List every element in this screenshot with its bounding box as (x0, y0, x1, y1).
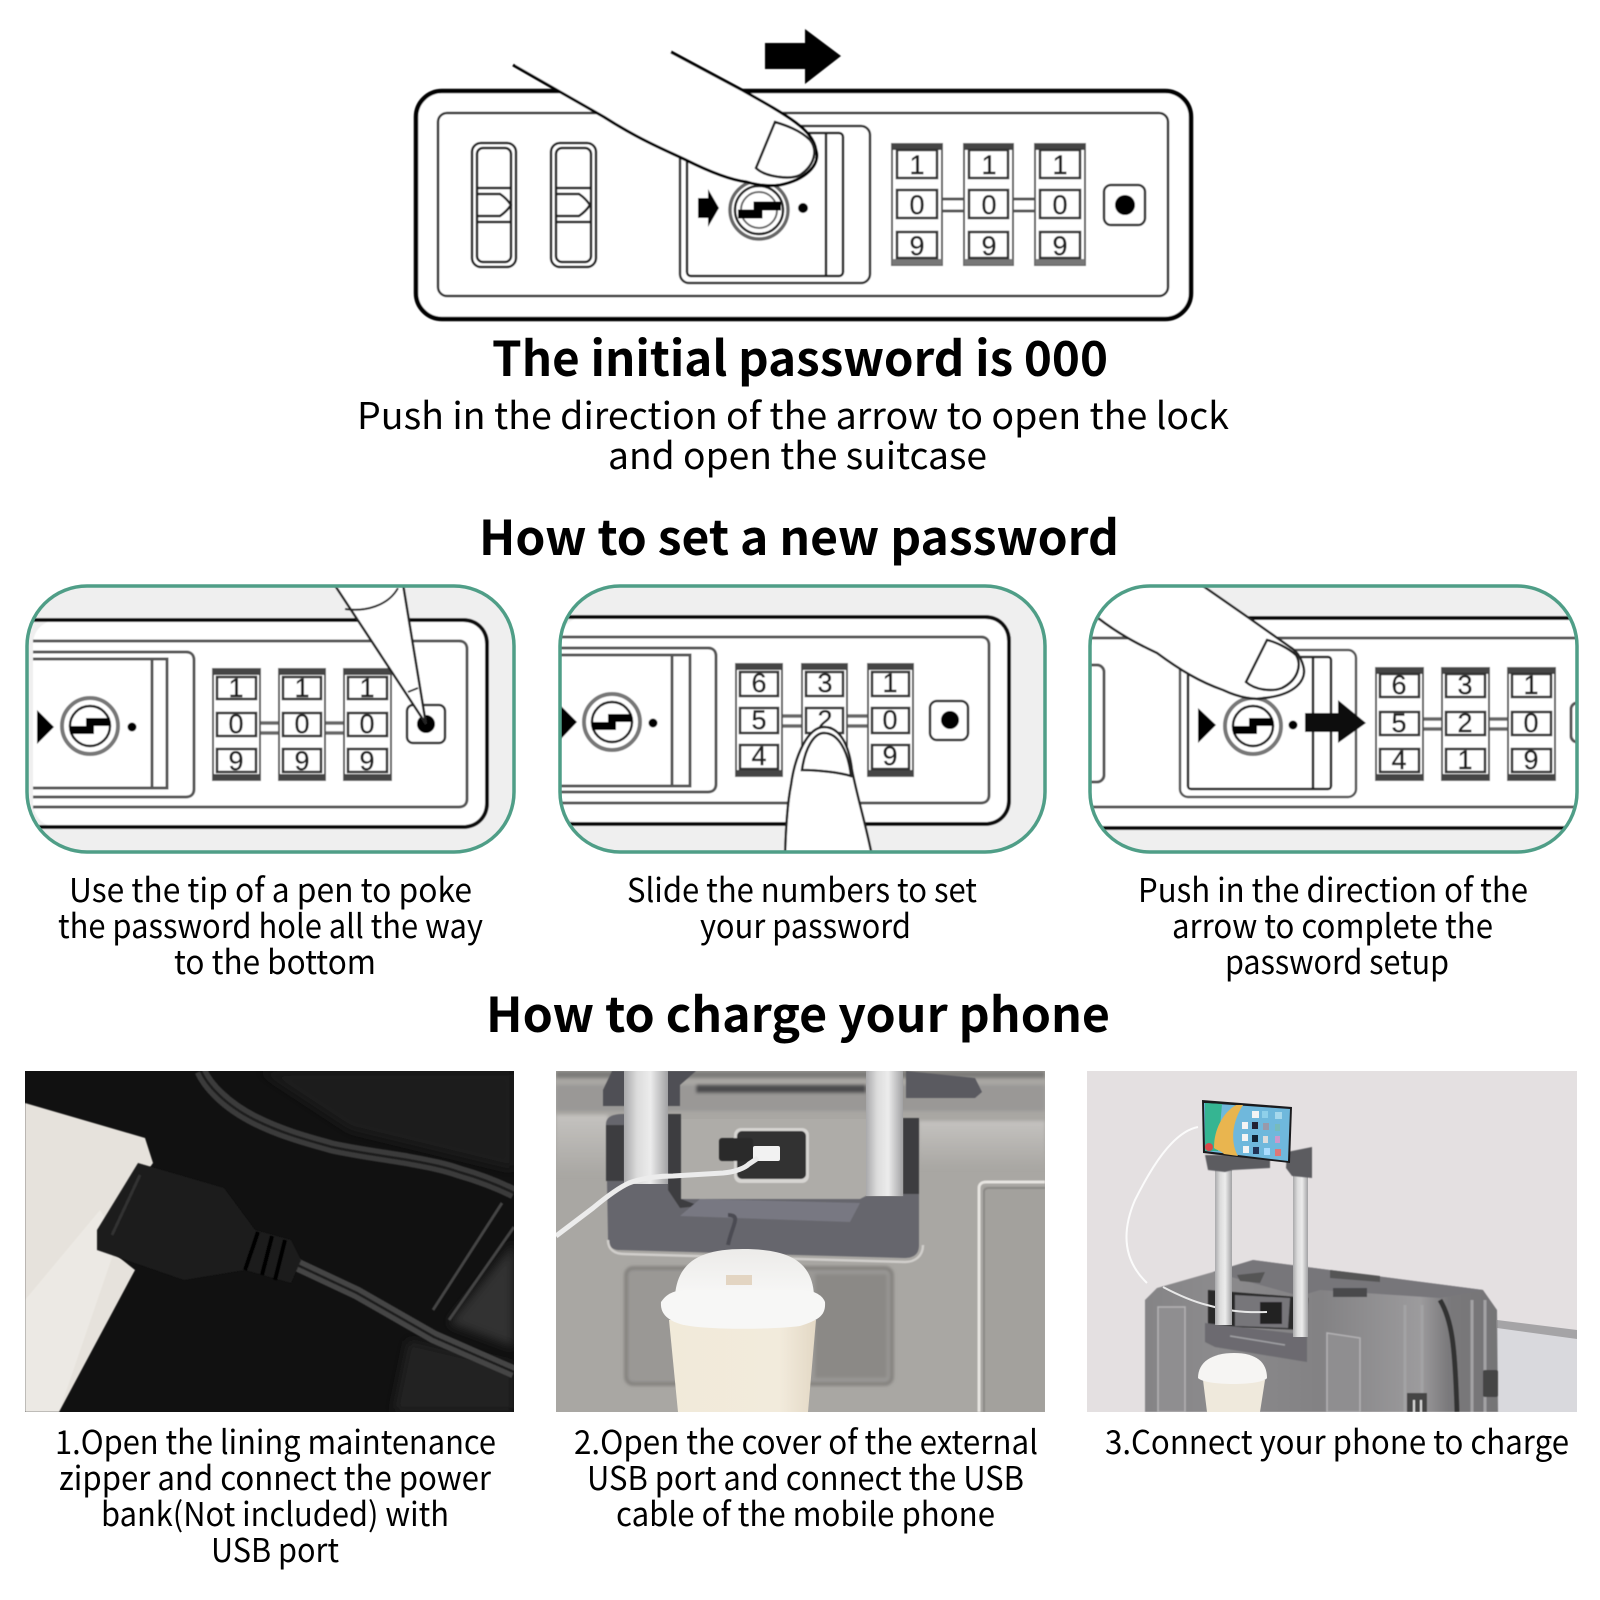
handle tubes (624, 1071, 903, 1196)
inner plate (560, 637, 989, 803)
telescopic handle (1215, 1170, 1308, 1337)
dark upper handle mounts (603, 1071, 982, 1106)
coffee cup (661, 1249, 825, 1412)
background case behind (1497, 1320, 1577, 1412)
wheels 6 5 4, 3 2 1, 1 0 9: 5 (1391, 708, 1407, 738)
photo: USB cable plugged into power bank (25, 1071, 514, 1412)
wheels 6 5 4, 3 2 1, 1 0 9: 1 (1457, 745, 1473, 775)
finger pressing slider (1080, 586, 1304, 699)
icon: push direction arrow (1305, 700, 1366, 743)
lower cable (293, 1263, 514, 1372)
caption: step two, slide numbers: your password (700, 900, 911, 948)
inner plate (1050, 638, 1600, 807)
wheels 6 5 4, 3 2 1, 1 0 9: 3 (1457, 670, 1473, 700)
caption: charging step 2 (574, 1416, 1038, 1536)
caption: charging step 2: cable of the mobile phone (616, 1488, 995, 1536)
wheels 1 0 9: 1 (359, 673, 375, 703)
caption: step three, push arrow (1138, 864, 1528, 984)
lock body close-up (1050, 618, 1600, 828)
caption: charging step 1: bank(Not included) with (101, 1488, 449, 1536)
coffee cup (1198, 1353, 1267, 1412)
USB plug (97, 1163, 301, 1283)
smartphone (1202, 1100, 1292, 1163)
left latch slots (472, 143, 596, 267)
wheels 1 0 9: 9 (294, 746, 310, 776)
panel: slide the numbers (560, 586, 1045, 856)
wheels 6 5 4, 3 2 1, 1 0 9 (1376, 668, 1555, 780)
wheels 1 0 9: 0 (228, 709, 244, 739)
left slot stub (1092, 662, 1106, 784)
reset hole (407, 705, 445, 743)
heading: initial password: The initial password is 000 (492, 320, 1108, 390)
combination wheels 1 0 9: 1 (981, 150, 997, 180)
combination wheels 1 0 9: 9 (981, 231, 997, 261)
lock outer body (416, 91, 1191, 319)
wheels 6 5 4, 3 2, 1 0 9: 3 (817, 668, 833, 698)
right shell ridge (979, 1182, 1045, 1412)
photo: external USB port on suitcase with cup (556, 1071, 1045, 1412)
combination wheels 1 0 9: 9 (1052, 231, 1068, 261)
icon: push direction arrow (765, 29, 841, 84)
wheels 6 5 4, 3 2, 1 0 9: 6 (751, 668, 767, 698)
handle top grip (1205, 1147, 1312, 1178)
upper cable (201, 1071, 514, 1193)
caption: step three, push arrow: Push in the direction of the (1138, 864, 1528, 912)
pen tip (334, 584, 426, 724)
wheels 6 5 4, 3 2, 1 0 9: 0 (882, 705, 898, 735)
power bank (25, 1103, 153, 1412)
dark handle housing (606, 1114, 923, 1262)
caption: step three, push arrow: password setup (1225, 936, 1449, 984)
caption: step two, slide numbers: Slide the numbers to set (627, 864, 977, 912)
hero diagram: lock being pushed open (416, 29, 1191, 319)
suitcase shell (1145, 1260, 1498, 1412)
heading: charge your phone: How to charge your phone (486, 976, 1110, 1046)
cup recess (626, 1268, 892, 1384)
slider and key cylinder (1180, 650, 1356, 797)
wheels 6 5 4, 3 2 1, 1 0 9: 6 (1391, 670, 1407, 700)
combination wheels 1 0 9: 9 (909, 231, 925, 261)
reset hole stub (1568, 701, 1576, 744)
wheels 1 0 9 (213, 669, 391, 780)
text block: how to open the lock (357, 386, 1230, 480)
panel: push to finish setup (1050, 586, 1600, 852)
wheels 6 5 4, 3 2 1, 1 0 9: 4 (1391, 745, 1407, 775)
USB socket (719, 1128, 809, 1183)
wheels 6 5 4, 3 2, 1 0 9: 5 (751, 705, 767, 735)
combination wheels 1 0 9: 1 (1052, 150, 1068, 180)
text block: how to open the lock: and open the suitcase (608, 426, 987, 480)
combination wheels 1 0 9: 0 (909, 190, 925, 220)
caption: charging step 3: 3.Connect your phone to charge (1105, 1416, 1569, 1464)
lock body close-up (33, 620, 487, 827)
caption: charging step 1: 1.Open the lining maintenance (55, 1416, 496, 1464)
white charging cable (556, 1158, 758, 1236)
body outline (560, 617, 1009, 824)
caption: charging step 1 (55, 1416, 496, 1572)
body outline (33, 620, 487, 827)
caption: charging step 1: USB port (211, 1524, 339, 1572)
photo: suitcase with phone on handle (1087, 1071, 1577, 1412)
wheels 1 0 9: 0 (294, 709, 310, 739)
wheels 6 5 4, 3 2 1, 1 0 9: 0 (1523, 708, 1539, 738)
caption: step two, slide numbers (627, 864, 977, 948)
caption: step one, pen: Use the tip of a pen to poke (69, 864, 472, 912)
wheels 1 0 9: 9 (228, 746, 244, 776)
wheels 6 5 4, 3 2, 1 0 9: 1 (882, 668, 898, 698)
caption: step one, pen: to the bottom (174, 936, 376, 984)
wheels 6 5 4, 3 2 1, 1 0 9: 9 (1523, 745, 1539, 775)
caption: charging step 1: zipper and connect the power (59, 1452, 491, 1500)
lock body close-up (560, 617, 1009, 824)
slider and key cylinder (33, 652, 194, 797)
upper shell highlights (556, 1071, 1045, 1157)
combination wheels 1 0 9: 0 (1052, 190, 1068, 220)
USB cable to port (1163, 1287, 1267, 1312)
zipper (433, 1203, 514, 1320)
finger pressing slider (513, 50, 817, 186)
caption: step one, pen: the password hole all the way (58, 900, 483, 948)
wheels 1 0 9: 1 (228, 673, 244, 703)
combination wheels 1 0 9: 1 (909, 150, 925, 180)
text block: how to open the lock: Push in the direction of the arrow to open the lock (357, 386, 1230, 440)
reset hole (930, 701, 968, 740)
wheels 6 5 4, 3 2 1, 1 0 9: 2 (1457, 708, 1473, 738)
panel: poke reset hole with pen (27, 584, 514, 852)
wheels 1 0 9: 9 (359, 746, 375, 776)
slider with key cylinder (680, 126, 870, 283)
USB opening and holder (1205, 1290, 1308, 1362)
finger on wheel (785, 727, 872, 856)
wheels 6 5 4, 3 2, 1 0 9 (736, 664, 913, 776)
wheels 6 5 4, 3 2, 1 0 9: 2 (817, 705, 833, 735)
slider and key cylinder (560, 648, 716, 792)
wheels 6 5 4, 3 2 1, 1 0 9: 1 (1523, 670, 1539, 700)
heading: set a new password: How to set a new password (479, 499, 1119, 569)
reset hole (1104, 185, 1145, 225)
combination wheels 1 0 9 (892, 144, 1085, 265)
caption: charging step 2: 2.Open the cover of the external (574, 1416, 1038, 1464)
lining texture (260, 1071, 514, 1412)
inner plate (33, 641, 467, 807)
app icons (1242, 1111, 1282, 1156)
lock inner plate (438, 113, 1168, 296)
wheels 6 5 4, 3 2, 1 0 9: 4 (751, 741, 767, 771)
combination wheels 1 0 9: 0 (981, 190, 997, 220)
wheels 6 5 4, 3 2, 1 0 9: 9 (882, 741, 898, 771)
caption: charging step 2: USB port and connect the USB (587, 1452, 1024, 1500)
recessed shell plate (681, 1119, 866, 1201)
white USB plug (753, 1146, 780, 1161)
wheels 1 0 9: 1 (294, 673, 310, 703)
caption: step three, push arrow: arrow to complete the (1172, 900, 1493, 948)
charging cable loop (1126, 1127, 1198, 1283)
wheels 1 0 9: 0 (359, 709, 375, 739)
caption: step one, pen (58, 864, 483, 984)
